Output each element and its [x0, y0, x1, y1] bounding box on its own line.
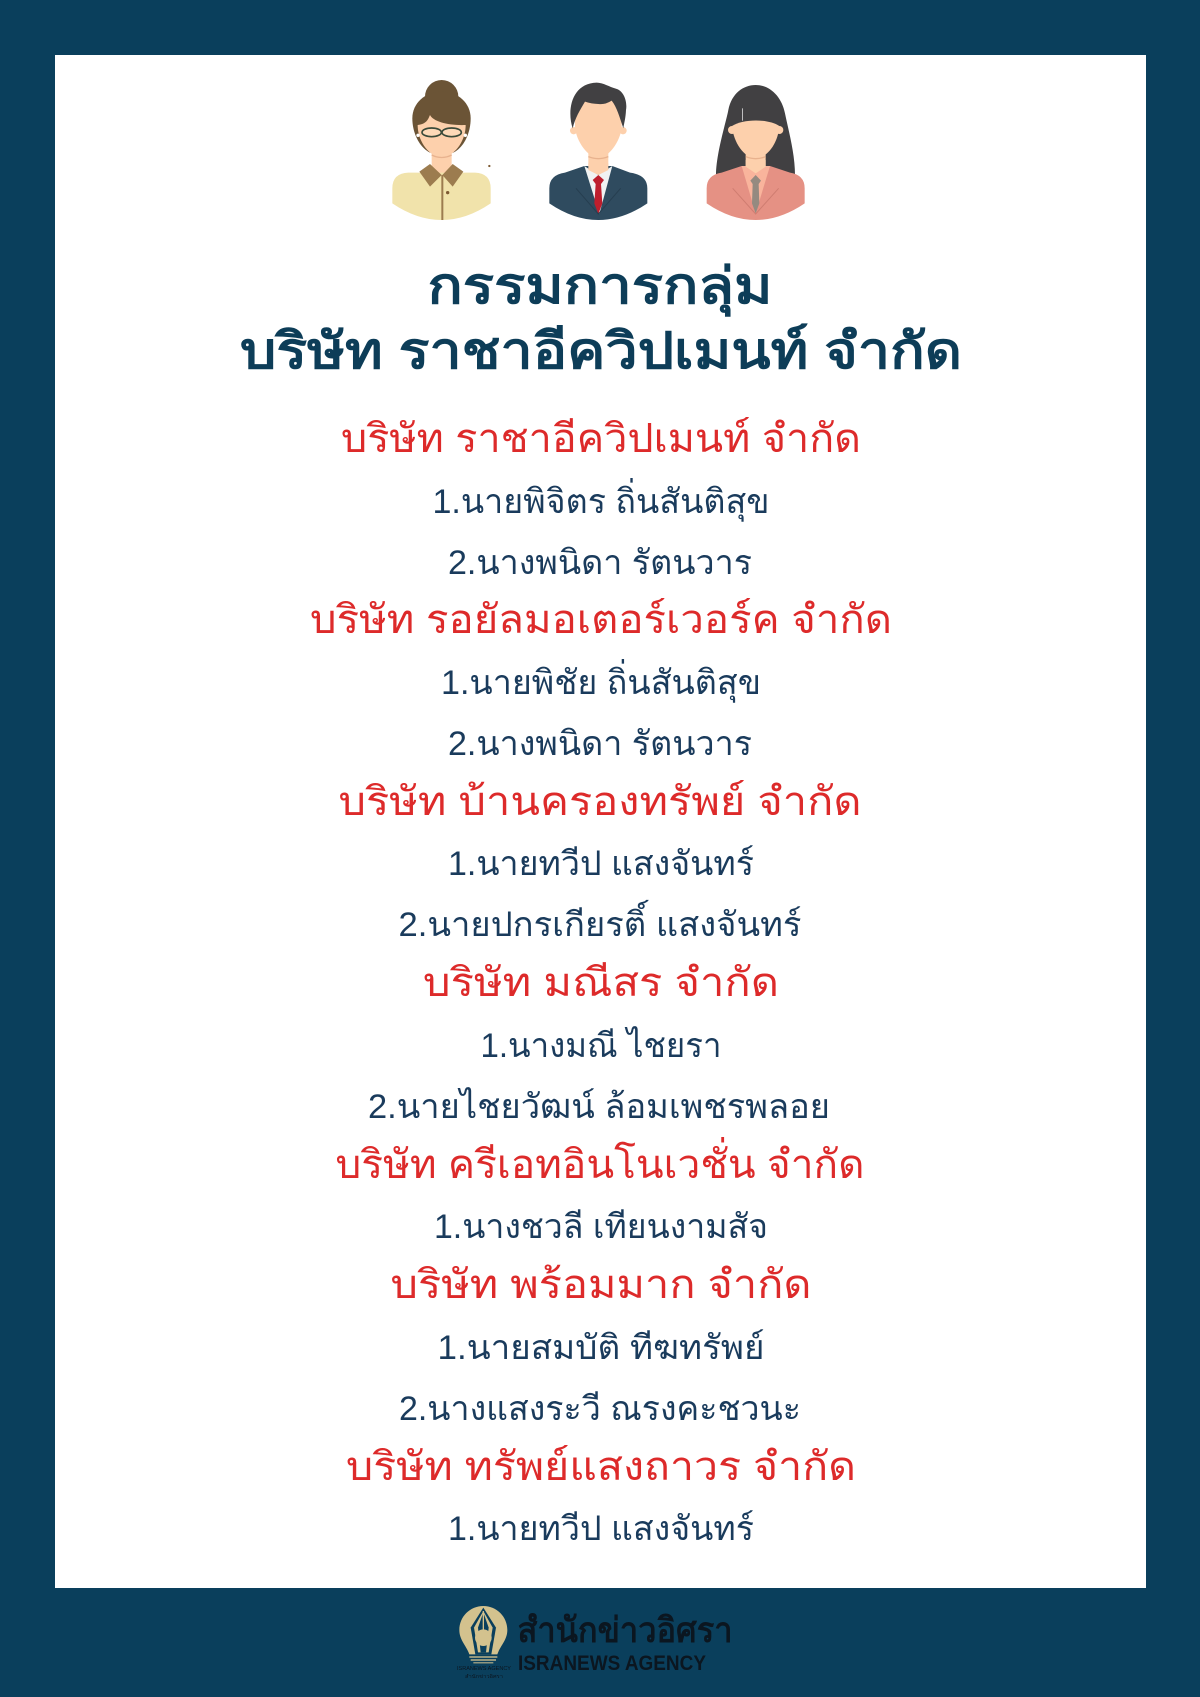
company 2 — [310, 597, 892, 763]
icon: man in navy suit with red tie — [549, 83, 647, 220]
icon: pen nib lightbulb emblem — [459, 1606, 507, 1663]
footer logo: Isranews Agency: สำนักข่าวอิศรา — [518, 1611, 732, 1650]
company 6: 1.นายสมบัติ ทีฆทรัพย์ — [438, 1329, 764, 1367]
company 2: 1.นายพิชัย ถิ่นสันติสุข — [441, 659, 761, 703]
company 1: บริษัท ราชาอีควิปเมนท์ จำกัด — [341, 416, 861, 461]
company 4 — [368, 961, 830, 1126]
company 7 — [346, 1444, 856, 1548]
company 5: บริษัท ครีเอทอินโนเวชั่น จำกัด — [336, 1137, 864, 1187]
company 4: 2.นายไชยวัฒน์ ล้อมเพชรพลอย — [368, 1087, 830, 1126]
company 6: 2.นางแสงระวี ณรงคะชวนะ — [399, 1390, 801, 1428]
icon: woman with glasses and hair bun — [392, 80, 491, 220]
company 2: บริษัท รอยัลมอเตอร์เวอร์ค จำกัด — [310, 597, 892, 642]
company 1 — [341, 416, 861, 582]
company 5: 1.นางชวลี เทียนงามสัจ — [434, 1208, 768, 1246]
footer logo: Isranews Agency: สำนักข่าวอิศรา — [465, 1673, 503, 1680]
company list — [310, 416, 892, 1548]
company 6: บริษัท พร้อมมาก จำกัด — [390, 1263, 812, 1307]
icon: woman with long dark hair in pink jacket — [707, 85, 805, 220]
company 3: 1.นายทวีป แสงจันทร์ — [448, 845, 754, 883]
title: บริษัท ราชาอีควิปเมนท์ จำกัด — [240, 323, 962, 379]
company 4: 1.นางมณี ไชยรา — [480, 1026, 722, 1065]
company 4: บริษัท มณีสร จำกัด — [423, 961, 779, 1005]
company 3: บริษัท บ้านครองทรัพย์ จำกัด — [338, 779, 862, 824]
company 1: 2.นางพนิดา รัตนวาร — [448, 544, 752, 582]
company 7: บริษัท ทรัพย์แสงถาวร จำกัด — [346, 1444, 856, 1489]
company 3 — [338, 779, 862, 944]
company 2: 2.นางพนิดา รัตนวาร — [448, 725, 752, 763]
company 1: 1.นายพิจิตร ถิ่นสันติสุข — [432, 478, 770, 522]
company 5 — [336, 1137, 864, 1246]
footer logo: Isranews Agency: ISRANEWS AGENCY — [518, 1652, 706, 1675]
footer logo: Isranews Agency — [457, 1606, 732, 1680]
title — [240, 258, 962, 379]
company 7: 1.นายทวีป แสงจันทร์ — [448, 1510, 754, 1548]
company 3: 2.นายปกรเกียรติ์ แสงจันทร์ — [398, 899, 802, 944]
title: กรรมการกลุ่ม — [428, 258, 772, 317]
company 6 — [390, 1263, 812, 1428]
footer logo: Isranews Agency: ISRANEWS AGENCY — [457, 1666, 512, 1672]
